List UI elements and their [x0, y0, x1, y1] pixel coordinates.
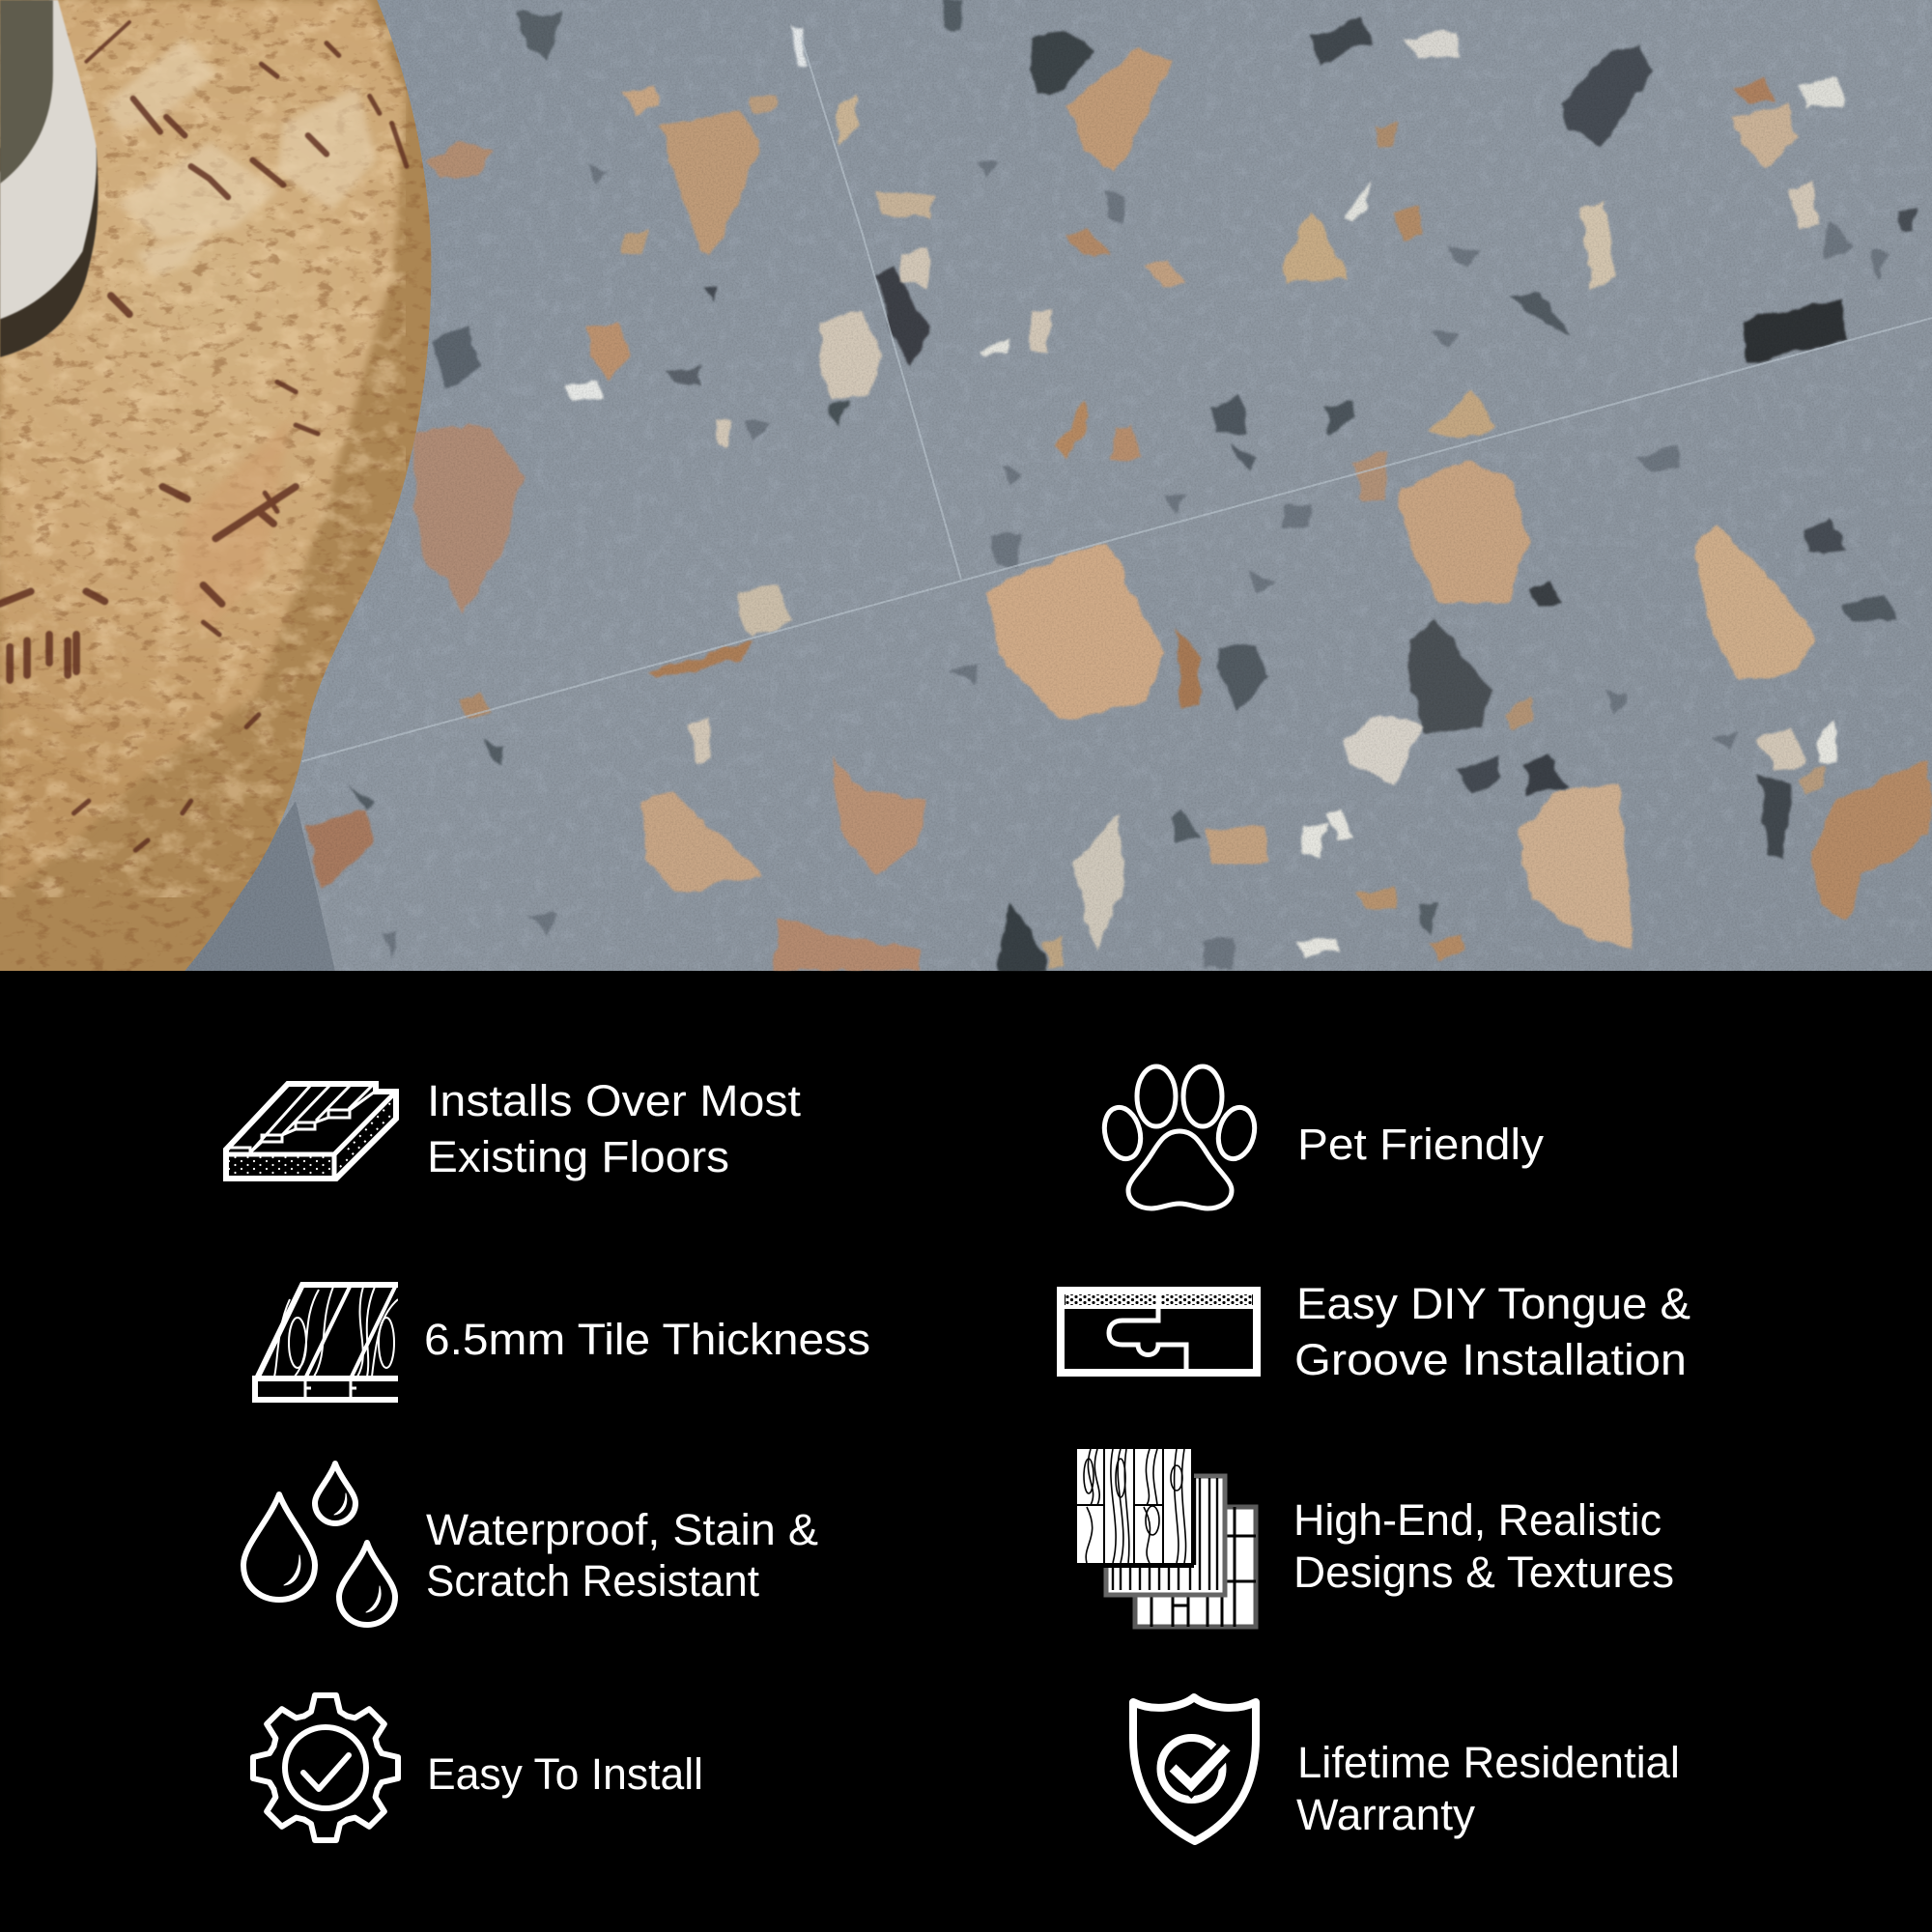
feature: high-end, realistic designs and textures [1074, 1446, 1674, 1627]
cork top surface [0, 0, 406, 897]
bottle interior [0, 0, 53, 184]
feature: installs over most existing floors [226, 1076, 802, 1181]
cork warm grain panel [173, 419, 290, 629]
terrazzo floor base [0, 0, 1932, 971]
icon: shield with check [1133, 1697, 1256, 1841]
cork brown texture [0, 0, 443, 971]
text: existing floors: Existing Floors [427, 1132, 729, 1181]
front sample: wood grain [1077, 1449, 1191, 1563]
floor grain [0, 0, 1932, 971]
text: designs and textures: Designs & Textures [1293, 1548, 1674, 1597]
middle sample: stripes [1106, 1476, 1225, 1595]
tan terrazzo chips [305, 49, 1928, 971]
text: warranty: Warranty [1296, 1790, 1476, 1839]
feature: 6.5mm tile thickness [255, 1285, 870, 1400]
back sample: bricks [1135, 1507, 1256, 1627]
icon: wood plank with thickness [255, 1285, 401, 1400]
icon: water drops [243, 1463, 395, 1625]
feature: pet friendly [1099, 1066, 1545, 1208]
feature: lifetime residential warranty [1133, 1697, 1680, 1841]
text: waterproof, stain and: Waterproof, Stain & [426, 1505, 818, 1554]
cork dark marks [0, 22, 407, 850]
text: high-end, realistic: High-End, Realistic [1293, 1495, 1662, 1545]
cork stool [0, 0, 443, 971]
cork pale blotches [0, 0, 406, 897]
black gap around front sample [1074, 1446, 1194, 1568]
text: 6.5mm tile thickness: 6.5mm Tile Thickness [424, 1315, 870, 1364]
icon: tongue and groove cross-section [1061, 1287, 1257, 1377]
cork bright patches [104, 37, 376, 277]
text: easy to install: Easy To Install [427, 1749, 703, 1799]
darker floor tile bottom left [185, 801, 335, 971]
dark terrazzo chips [349, 0, 1916, 971]
feature: easy DIY tongue and groove installation [1061, 1279, 1690, 1384]
text: pet friendly: Pet Friendly [1297, 1120, 1545, 1169]
mid grey terrazzo chips [382, 160, 1891, 967]
text: groove installation: Groove Installation [1294, 1335, 1687, 1384]
feature: easy to install [253, 1695, 703, 1840]
icon: gear with check [253, 1695, 398, 1840]
pale terrazzo chips [564, 27, 1844, 955]
bottle white label [0, 0, 97, 319]
photo: terrazzo floor with cork stool [0, 0, 1932, 971]
bottle shadow [0, 148, 98, 357]
icon: layered floor section [226, 1084, 396, 1179]
text: scratch resistant: Scratch Resistant [426, 1556, 759, 1605]
bottle on stool [0, 0, 98, 357]
text: lifetime residential: Lifetime Residential [1297, 1738, 1680, 1787]
feature: waterproof, stain and scratch resistant [243, 1463, 818, 1625]
text: installs over most: Installs Over Most [427, 1076, 802, 1125]
floor mottling [1789, 731, 1839, 843]
icon: paw print [1099, 1066, 1260, 1208]
text: easy DIY tongue and: Easy DIY Tongue & [1296, 1279, 1690, 1328]
icon: stacked texture samples [1074, 1446, 1256, 1627]
cork rim base colour [0, 0, 443, 971]
tile seams [301, 37, 1932, 761]
